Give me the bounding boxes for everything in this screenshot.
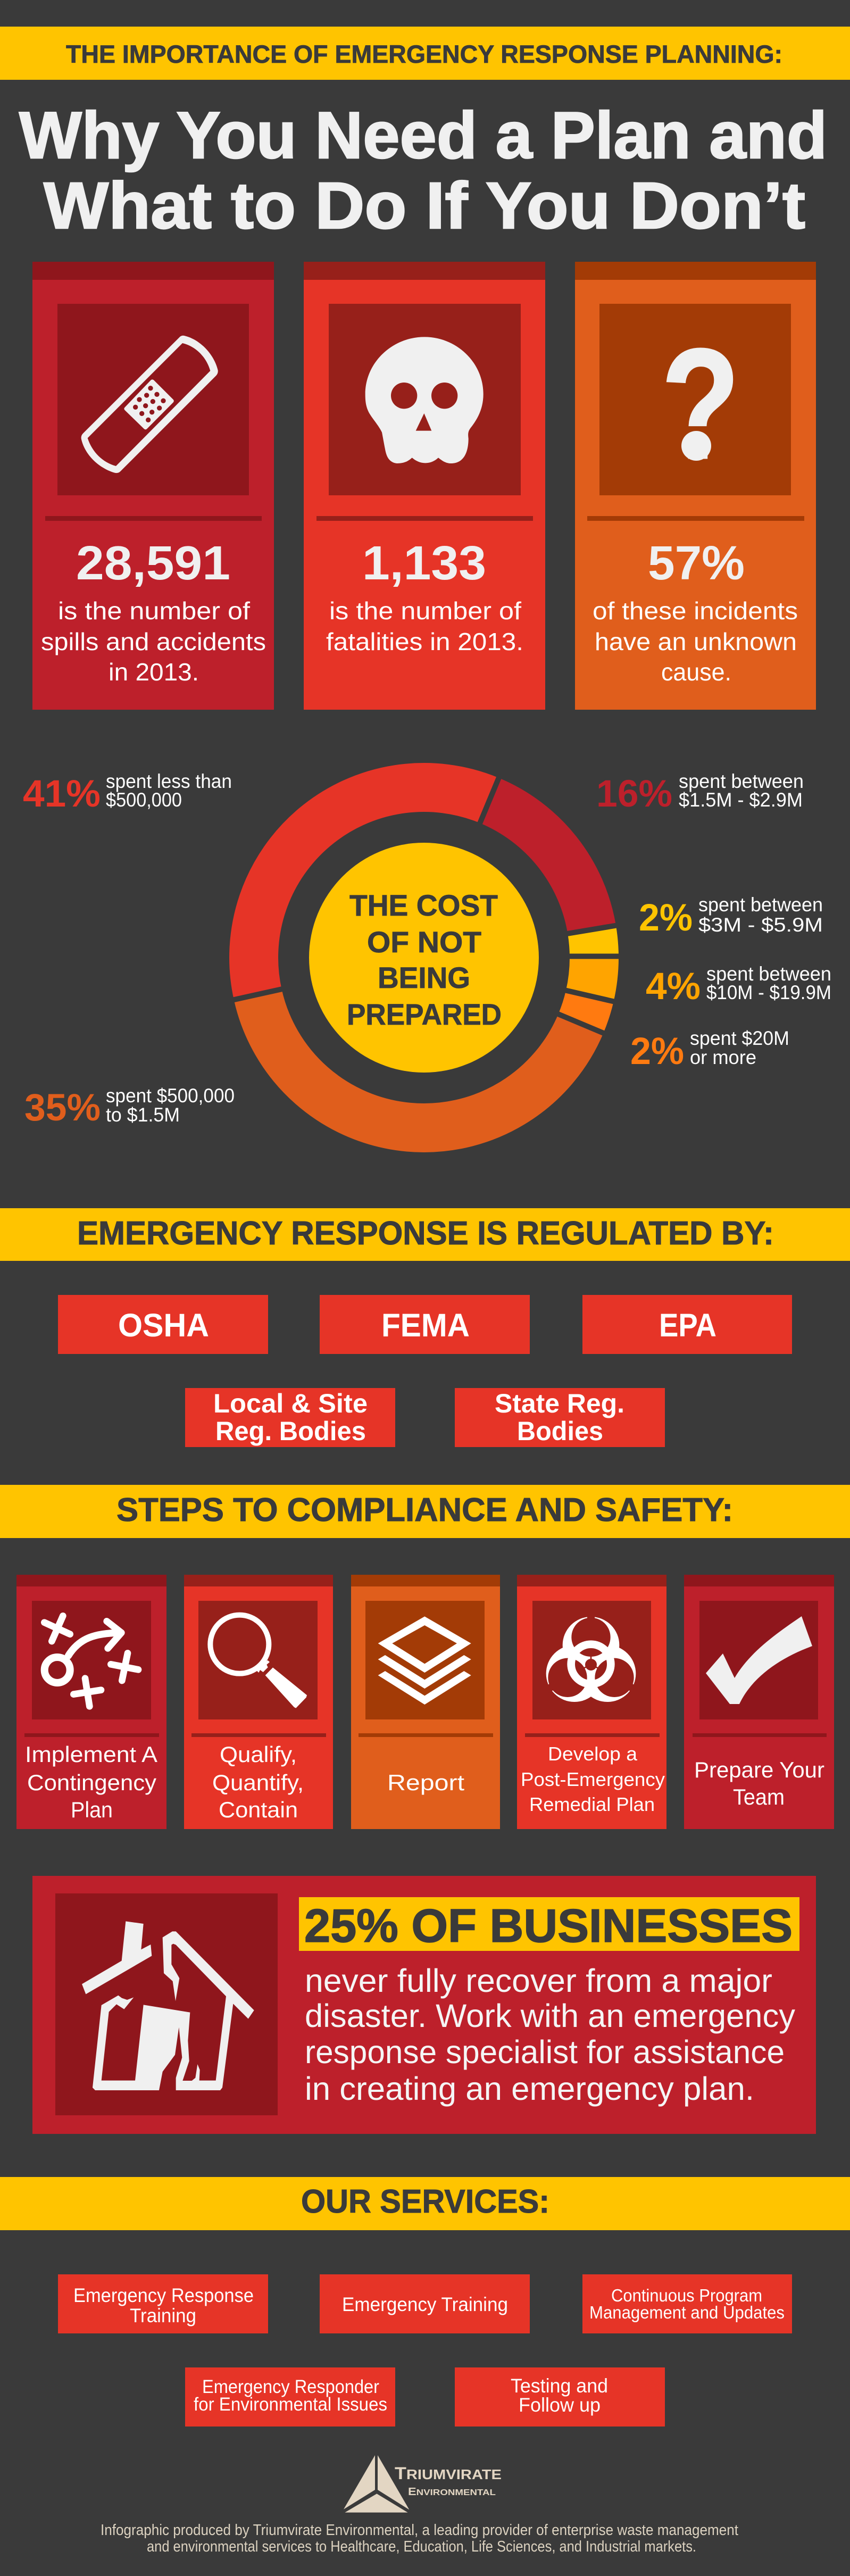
regulator: local and site bodies: [185, 1388, 395, 1447]
logo: Triumvirate Environmental: [344, 2455, 502, 2513]
service: emergency responder: [185, 2367, 395, 2427]
panel: fatalities: fatalities in 2013.: [326, 628, 523, 655]
legend: 2% spent between $3M and $5.9M: spent between: [698, 894, 823, 916]
step: implement a contingency plan: Contingency: [27, 1770, 156, 1795]
regulator: EPA: [582, 1295, 792, 1354]
service: continuous program management: Management and Updates: [589, 2303, 785, 2322]
step: qualify, quantify, contain: Qualify,: [220, 1742, 297, 1767]
regulator: state bodies: State Reg.: [495, 1389, 624, 1418]
legend: 4%: spent between: [706, 963, 831, 985]
service: emergency response training: Emergency Response: [73, 2284, 254, 2306]
step: prepare your team: [684, 1575, 834, 1829]
panel: 25% of businesses: disaster. Work with an emergency: [305, 1998, 795, 2034]
footer text: [101, 2522, 738, 2555]
legend: 2% spent $20M or more: spent $20M: [690, 1027, 789, 1049]
legend: 35%: 35%: [24, 1087, 101, 1129]
legend: 41%: 41%: [23, 773, 101, 815]
title: [19, 99, 827, 243]
panel: 25% of businesses: 25% OF BUSINESSES: [304, 1899, 793, 1952]
service: testing and follow up: [455, 2367, 665, 2427]
panel: 25% of businesses: [32, 1876, 816, 2134]
panel: unknown cause: of these incidents: [593, 597, 798, 625]
panel: fatalities: is the number of: [329, 597, 521, 625]
panel: unknown cause: 57%: [648, 537, 745, 590]
service: continuous program management: Continuous Program: [611, 2286, 762, 2305]
donut chart: the cost of not being prepared: [232, 776, 622, 1128]
service: emergency response training: [58, 2274, 268, 2333]
panel: fatalities: [304, 262, 545, 710]
step: prepare your team: Team: [733, 1784, 785, 1809]
step: qualify, quantify, contain: Quantify,: [212, 1770, 304, 1795]
panel: unknown cause: cause.: [661, 658, 731, 686]
icon: playbook: [44, 1616, 138, 1706]
step: implement a contingency plan: Implement A: [25, 1742, 157, 1767]
legend: 35%: spent $500,000: [106, 1085, 235, 1107]
icon: skull: [365, 337, 484, 463]
heading: steps to compliance: [0, 1485, 850, 1538]
legend: 2% spent $20M or more: or more: [690, 1046, 756, 1068]
logo: Triumvirate Environmental: TRIUMVIRATE: [395, 2464, 502, 2483]
service: emergency training: [320, 2274, 530, 2333]
legend: 16%: 16%: [596, 773, 672, 815]
legend: 4%: $10M - $19.9M: [706, 982, 831, 1003]
legend: 2% spent between $3M and $5.9M: 2%: [639, 897, 693, 939]
legend: 2% spent between $3M and $5.9M: [639, 894, 823, 939]
header banner: THE IMPORTANCE OF EMERGENCY RESPONSE PLANNING:: [66, 40, 782, 68]
heading: our services: OUR SERVICES:: [301, 2183, 549, 2220]
legend: 2% spent $20M or more: [630, 1027, 789, 1073]
legend: 35%: to $1.5M: [106, 1104, 180, 1126]
regulator: local and site bodies: Reg. Bodies: [215, 1416, 366, 1446]
panel: unknown cause: have an unknown: [595, 628, 797, 655]
icon: stacked layers: [378, 1616, 471, 1705]
icon: check mark: [706, 1616, 812, 1704]
donut chart: the cost of not being prepared: BEING: [378, 961, 470, 994]
step: implement a contingency plan: Plan: [71, 1797, 113, 1822]
regulator: OSHA: [58, 1295, 268, 1354]
legend: 2% spent $20M or more: 2%: [630, 1031, 684, 1073]
legend: 35%: [24, 1085, 235, 1129]
regulator: EPA: EPA: [659, 1307, 716, 1343]
service: emergency response training: Training: [130, 2305, 196, 2326]
service: emergency training: Emergency Training: [342, 2294, 508, 2315]
regulator: local and site bodies: Local & Site: [213, 1389, 368, 1418]
title: What to Do If You Don’t: [44, 169, 805, 243]
step: prepare your team: Prepare Your: [694, 1757, 824, 1782]
legend: 16%: [596, 770, 804, 815]
heading: regulated by: [0, 1208, 850, 1261]
step: implement a contingency plan: [16, 1575, 166, 1829]
icon: biohazard: [545, 1613, 637, 1702]
icon: bandage: [81, 336, 218, 473]
heading: our services: [0, 2177, 850, 2230]
legend: 16%: $1.5M - $2.9M: [679, 789, 803, 811]
service: testing and follow up: Testing and: [511, 2375, 608, 2397]
legend: 41%: $500,000: [106, 789, 182, 811]
heading: regulated by: EMERGENCY RESPONSE IS REGULATED BY:: [77, 1215, 774, 1252]
service: testing and follow up: Follow up: [519, 2394, 601, 2416]
donut chart: the cost of not being prepared: OF NOT: [367, 925, 481, 959]
step: qualify, quantify, contain: Contain: [219, 1797, 298, 1822]
panel: spills and accidents: spills and accidents: [41, 628, 266, 655]
step: post-emergency remedial plan: Remedial Plan: [529, 1793, 655, 1815]
header banner: [0, 27, 850, 80]
icon: magnifying glass: [210, 1615, 307, 1708]
step: post-emergency remedial plan: Develop a: [548, 1743, 638, 1765]
panel: fatalities: 1,133: [362, 537, 486, 590]
footer text: and environmental services to Healthcare, Education, Life Sciences, and Industrial markets.: [147, 2538, 696, 2555]
regulator: FEMA: FEMA: [381, 1307, 470, 1343]
donut chart: the cost of not being prepared: PREPARED: [347, 998, 502, 1031]
legend: 41%: [23, 770, 232, 815]
legend: 2% spent between $3M and $5.9M: $3M - $5.9M: [698, 914, 823, 936]
panel: spills and accidents: in 2013.: [109, 658, 199, 686]
legend: 41%: spent less than: [106, 770, 232, 792]
footer text: Infographic produced by Triumvirate Environmental, a leading provider of enterprise waste management: [101, 2522, 738, 2539]
donut chart: the cost of not being prepared: THE COST: [349, 888, 498, 922]
step: post-emergency remedial plan: [517, 1575, 666, 1829]
service: continuous program management: [582, 2274, 792, 2333]
step: post-emergency remedial plan: Post-Emergency: [521, 1768, 665, 1790]
panel: 25% of businesses: in creating an emergency plan.: [305, 2071, 754, 2107]
regulator: OSHA: OSHA: [118, 1307, 209, 1343]
title: Why You Need a Plan and: [19, 99, 827, 172]
legend: 16%: spent between: [679, 770, 804, 792]
heading: steps to compliance: STEPS TO COMPLIANCE AND SAFETY:: [116, 1492, 733, 1528]
logo: Triumvirate Environmental: ENVIRONMENTAL: [408, 2486, 496, 2498]
regulator: state bodies: Bodies: [517, 1416, 603, 1446]
step: report: [351, 1575, 500, 1829]
legend: 4%: [646, 963, 831, 1008]
panel: unknown cause: [575, 262, 816, 710]
panel: 25% of businesses: never fully recover from a major: [305, 1963, 772, 1999]
step: report: Report: [387, 1770, 464, 1795]
panel: spills and accidents: [32, 262, 274, 710]
regulator: FEMA: [320, 1295, 530, 1354]
step: qualify, quantify, contain: [184, 1575, 333, 1829]
regulator: state bodies: [455, 1388, 665, 1447]
service: emergency responder: Emergency Responder: [202, 2376, 379, 2397]
panel: spills and accidents: 28,591: [76, 537, 230, 590]
panel: spills and accidents: is the number of: [58, 597, 250, 625]
legend: 4%: 4%: [646, 966, 701, 1008]
icon: damaged house: [82, 1921, 254, 2090]
service: emergency responder: for Environmental Issues: [194, 2394, 387, 2415]
panel: 25% of businesses: response specialist for assistance: [305, 2034, 785, 2070]
icon: question mark: ?: [661, 317, 740, 492]
